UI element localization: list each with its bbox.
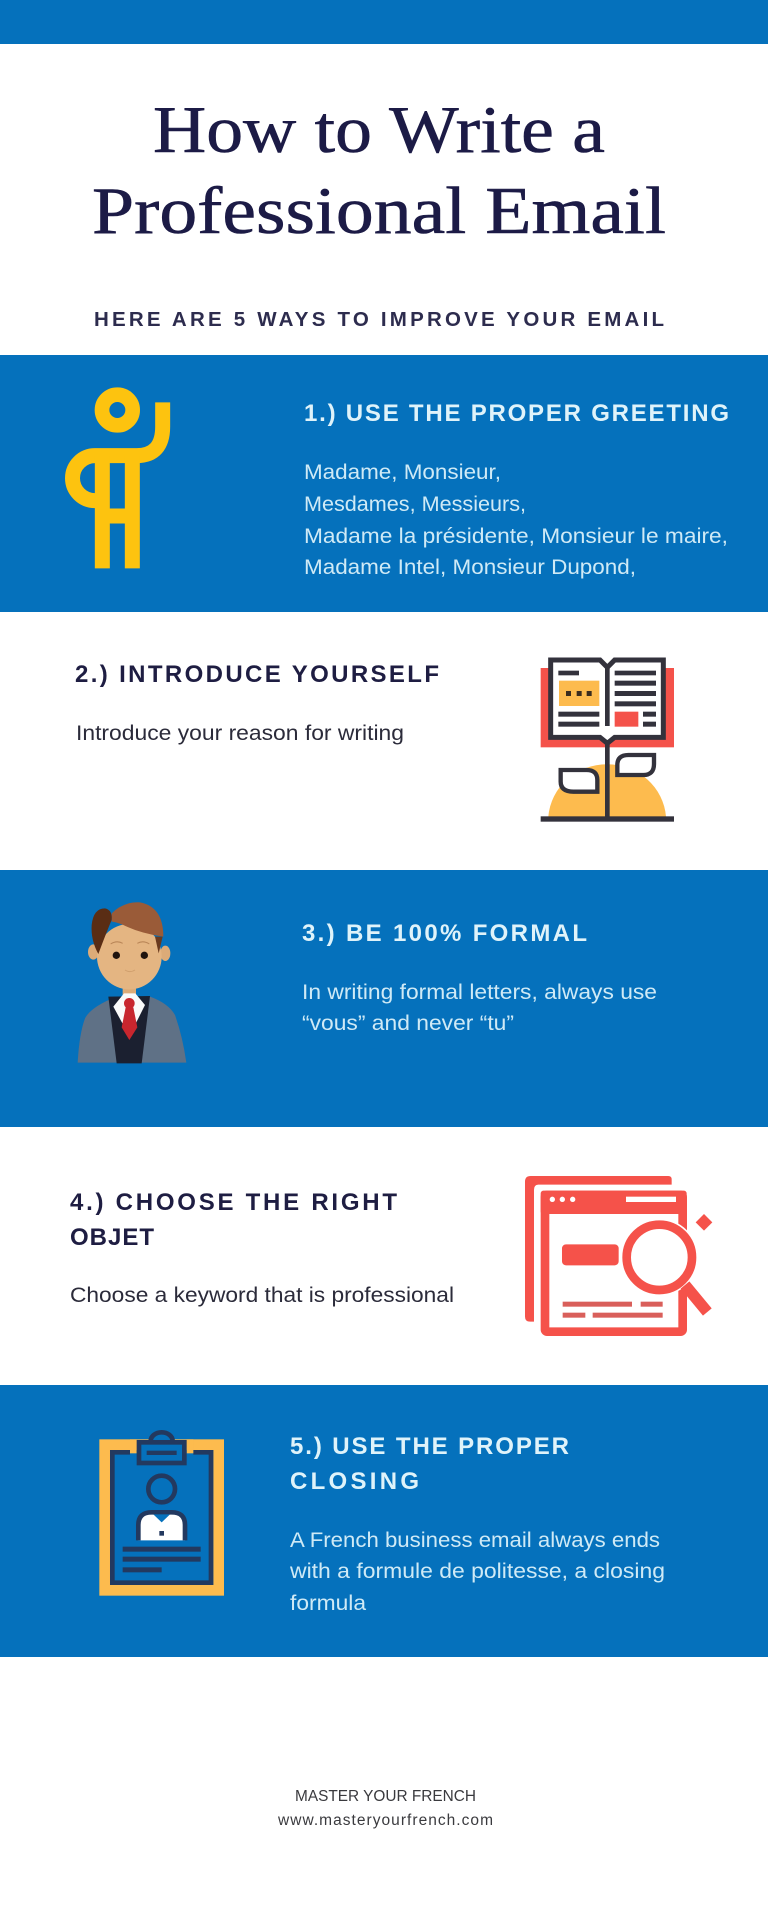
- top bar: [0, 0, 768, 44]
- panel: step 2 introduce: [75, 660, 674, 822]
- panel: step 3 formal: [0, 870, 768, 1127]
- text: closing formula: formula: [290, 1592, 366, 1615]
- footer: [277, 1788, 493, 1829]
- text: keyword: Choose a keyword that is professional: [70, 1284, 454, 1307]
- title: Professional Email: [92, 174, 666, 248]
- heading 3: 3.) BE 100% FORMAL: [302, 920, 587, 947]
- text: vous rule: [302, 981, 657, 1035]
- text: greeting list: Mesdames, Messieurs,: [304, 493, 526, 516]
- text: greeting list: Madame, Monsieur,: [304, 461, 501, 484]
- heading 1: 1.) USE THE PROPER GREETING: [304, 400, 729, 427]
- text: closing formula: A French business email always ends: [290, 1529, 660, 1552]
- panel: step 1 greeting: [0, 355, 768, 612]
- heading 4: OBJET: [70, 1224, 154, 1251]
- icon: clipboard with profile: [105, 1432, 219, 1590]
- icon: businessman: [78, 902, 186, 1063]
- text: greeting list: Madame la présidente, Monsieur le maire,: [304, 525, 728, 548]
- title: How to Write a: [153, 93, 605, 167]
- text: closing formula: [289, 1529, 665, 1615]
- heading 5: 5.) USE THE PROPER: [290, 1433, 569, 1460]
- heading 4: [70, 1189, 397, 1251]
- panel: step 5 closing: [0, 1385, 768, 1657]
- icon: open book plant: [541, 660, 674, 822]
- footer: www.masteryourfrench.com: [277, 1812, 493, 1829]
- icon: waving person: [72, 395, 163, 568]
- footer: MASTER YOUR FRENCH: [295, 1788, 476, 1805]
- text: vous rule: In writing formal letters, always use: [302, 981, 657, 1004]
- text: greeting list: [304, 461, 728, 579]
- title: [92, 93, 666, 248]
- panel: step 4 objet: [70, 1176, 712, 1332]
- subtitle: HERE ARE 5 WAYS TO IMPROVE YOUR EMAIL: [94, 308, 664, 331]
- heading 2: 2.) INTRODUCE YOURSELF: [75, 661, 439, 688]
- heading 5: CLOSING: [290, 1468, 419, 1495]
- text: vous rule: “vous” and never “tu”: [302, 1012, 514, 1035]
- text: greeting list: Madame Intel, Monsieur Dupond,: [304, 556, 636, 579]
- text: introduce reason: Introduce your reason for writing: [76, 722, 404, 745]
- icon: browser with magnifier: [525, 1176, 712, 1332]
- heading 4: 4.) CHOOSE THE RIGHT: [70, 1189, 397, 1216]
- heading 5: [290, 1433, 569, 1495]
- text: closing formula: with a formule de politesse, a closing: [289, 1560, 665, 1583]
